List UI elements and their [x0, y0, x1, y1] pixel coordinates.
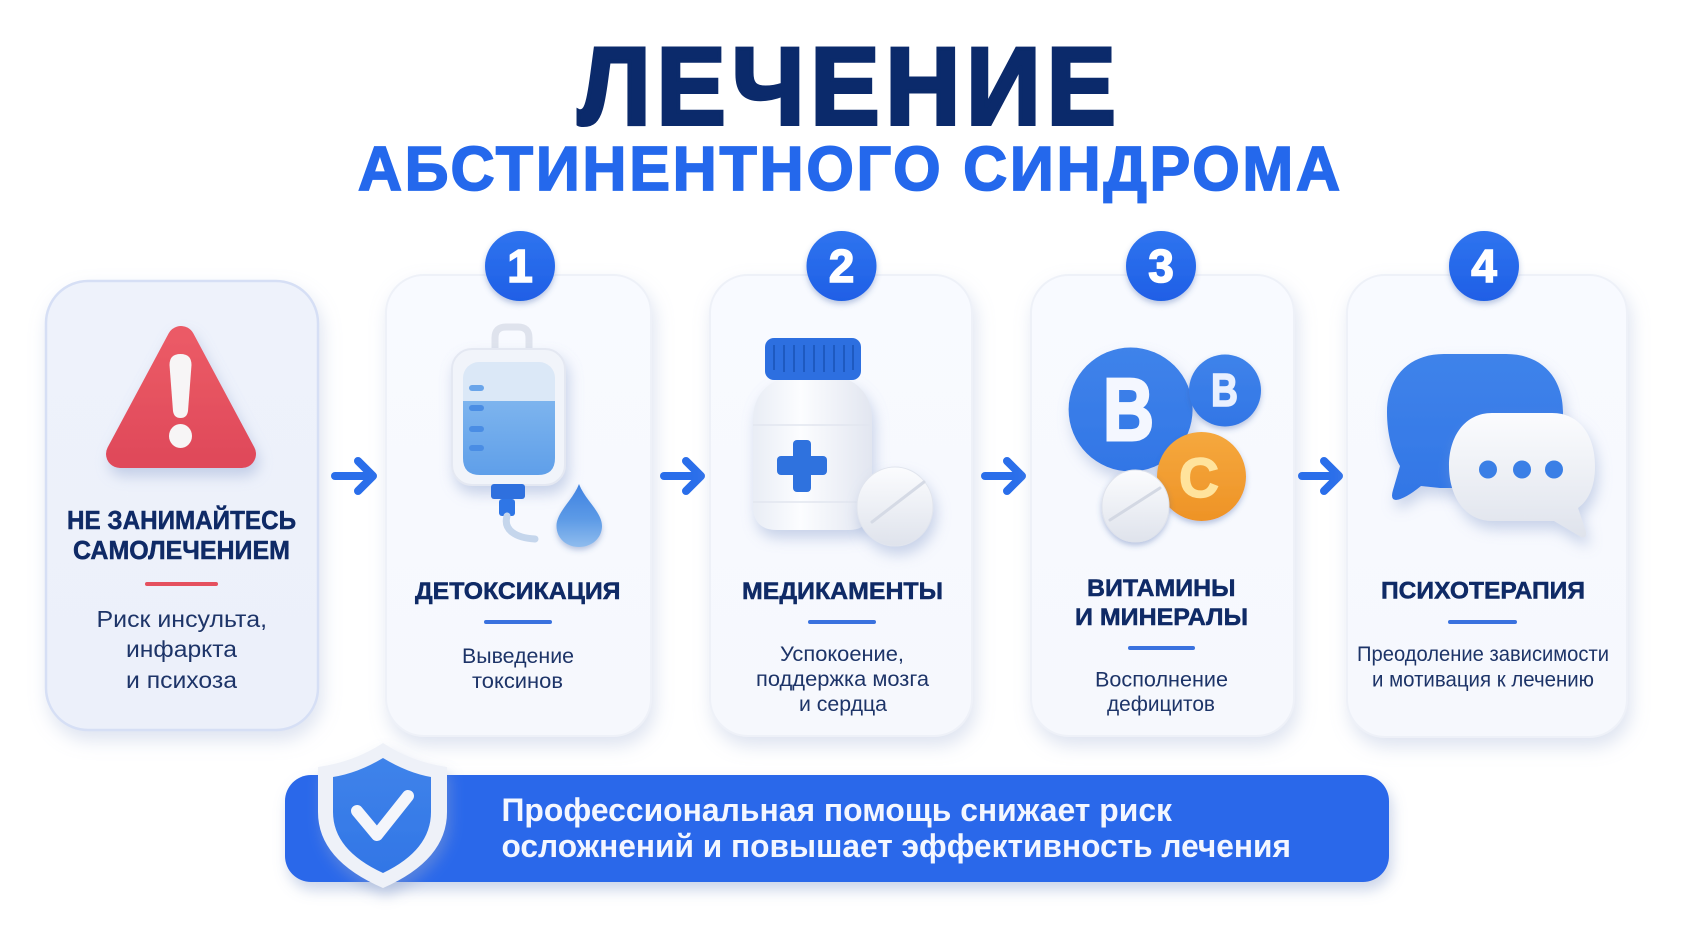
step 3 text: дефицитов	[1107, 693, 1215, 716]
arrow 2	[664, 461, 701, 491]
step 4 text: Преодоление зависимости	[1357, 643, 1609, 666]
icon: warning triangle	[120, 340, 242, 454]
step 3 heading: ВИТАМИНЫ	[1087, 575, 1236, 602]
warning text	[96, 606, 267, 693]
banner text: Профессиональная помощь снижает риск	[502, 792, 1173, 828]
panel: step 4 psychotherapy	[1347, 231, 1627, 737]
heading: ЛЕЧЕНИЕ: ЛЕЧЕНИЕ	[578, 24, 1116, 148]
panel: step 3 vitamins	[1031, 231, 1294, 736]
step 2 text: Успокоение,	[780, 643, 904, 666]
step 2 heading: МЕДИКАМЕНТЫ	[742, 578, 943, 605]
warning heading: САМОЛЕЧЕНИЕМ	[73, 537, 290, 565]
icon: IV drip bag	[452, 327, 602, 547]
icon: vitamins B, B, C and tablet: C	[1179, 446, 1219, 509]
step 1 text	[462, 645, 574, 693]
step 1 text: токсинов	[472, 670, 563, 693]
warning heading: НЕ ЗАНИМАЙТЕСЬ	[67, 505, 296, 535]
step 4 heading: ПСИХОТЕРАПИЯ	[1381, 578, 1585, 604]
panel: step 1 detoxification	[386, 231, 651, 736]
icon: vitamins B, B, C and tablet	[1069, 348, 1261, 542]
badge 4: 4	[1471, 240, 1497, 292]
icon: shield with check	[318, 743, 447, 888]
panel: warning card	[46, 281, 318, 730]
step 2 text: поддержка мозга	[756, 668, 929, 691]
badge 1: 1	[507, 240, 533, 292]
badge 2	[806, 231, 876, 301]
warning text: инфаркта	[126, 636, 238, 662]
icon: vitamins B, B, C and tablet: B	[1103, 360, 1154, 459]
badge 1	[485, 231, 555, 301]
arrow 1	[335, 461, 373, 491]
step 4 text: и мотивация к лечению	[1372, 668, 1594, 692]
step 2 text	[756, 643, 929, 716]
step 3 heading: И МИНЕРАЛЫ	[1075, 604, 1248, 631]
icon: vitamins B, B, C and tablet: B	[1211, 364, 1238, 416]
warning text: Риск инсульта,	[96, 606, 267, 632]
warning divider	[145, 582, 218, 586]
badge 3: 3	[1148, 240, 1174, 292]
step 3 heading	[1075, 575, 1248, 631]
step 4 text	[1357, 643, 1609, 692]
icon: speech bubbles	[1387, 354, 1595, 537]
badge 2: 2	[829, 240, 854, 292]
arrow 3	[985, 461, 1022, 491]
step 3 text: Восполнение	[1095, 668, 1228, 692]
subheading: АБСТИНЕНТНОГО СИНДРОМА: АБСТИНЕНТНОГО СИНДРОМА	[358, 134, 1340, 204]
step 3 text	[1095, 668, 1228, 716]
badge 3	[1126, 231, 1196, 301]
banner text: осложнений и повышает эффективность лечения	[502, 828, 1291, 864]
warning heading	[67, 505, 296, 565]
step 2 text: и сердца	[799, 693, 887, 716]
warning text: и психоза	[126, 667, 238, 693]
icon: pill bottle with tablet	[753, 338, 933, 546]
step 2 divider	[808, 620, 876, 624]
step 1 heading: ДЕТОКСИКАЦИЯ	[415, 578, 620, 605]
banner text	[502, 792, 1291, 864]
step 3 divider	[1128, 646, 1195, 650]
step 1 divider	[484, 620, 552, 624]
step 4 divider	[1448, 620, 1517, 624]
banner: professional help	[285, 743, 1389, 888]
badge 4	[1449, 231, 1519, 301]
step 1 text: Выведение	[462, 645, 574, 668]
arrow 4	[1302, 461, 1339, 491]
title	[358, 24, 1340, 204]
panel: step 2 medication	[710, 231, 972, 736]
